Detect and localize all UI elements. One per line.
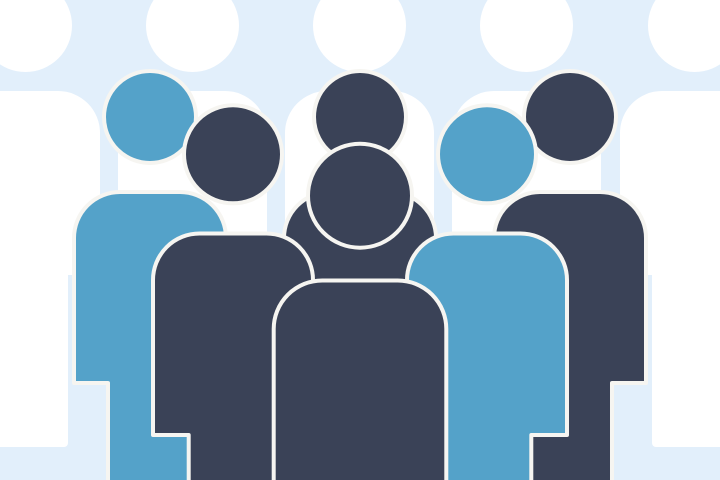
white figure 3: [285, 0, 434, 447]
head: [438, 105, 536, 203]
head: [184, 105, 282, 203]
body: [494, 192, 646, 480]
head: [524, 71, 616, 163]
head: [104, 71, 196, 163]
head: [308, 144, 412, 248]
body: [407, 234, 567, 480]
body: [153, 234, 313, 480]
foreground crowd: [74, 71, 646, 480]
middle row figure: navy left: [153, 105, 313, 480]
body: [284, 192, 436, 480]
middle row figure: blue right: [407, 105, 567, 480]
front figure: navy centre: [274, 144, 446, 480]
body: [74, 192, 226, 480]
white figure 5: [620, 0, 720, 447]
back row figure: navy right: [494, 71, 646, 480]
head: [314, 71, 406, 163]
back row figure: blue left: [74, 71, 226, 480]
back row figure: navy centre: [284, 71, 436, 480]
white figure 1: [0, 0, 100, 447]
white figure 2: [118, 0, 267, 447]
body: [274, 280, 446, 480]
white figure 4: [452, 0, 601, 447]
